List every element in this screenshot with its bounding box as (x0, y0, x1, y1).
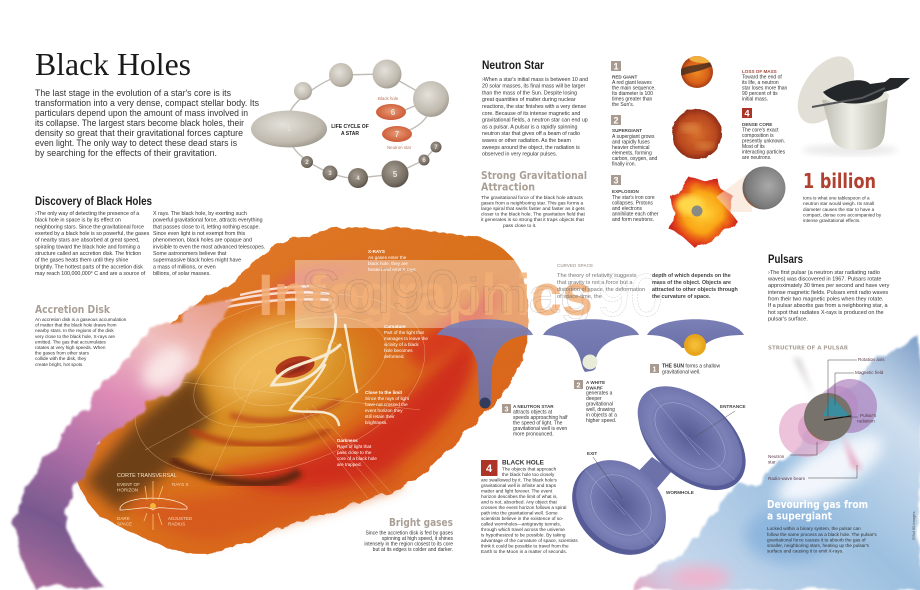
discovery text: phenomenon, black holes are opaque and (153, 238, 252, 244)
loss of mass: its life, a neutron (742, 80, 779, 86)
label 2: white dwarf: well, drawing (586, 407, 615, 413)
heading: strong gravitational attraction: Strong Gravitational (481, 170, 587, 182)
devouring gas text (767, 526, 877, 554)
label 3: neutron star: the speed of light. The (513, 420, 563, 426)
image credit: ©Sol 90 Images (911, 511, 916, 540)
neutron star text: core. Because of its intense magnetic and (482, 111, 580, 117)
fine orbit lines (112, 261, 448, 509)
pulsars text: If a pulsar absorbs gas from a neighboring star, a (768, 303, 888, 309)
discovery text: Some astronomers believe that (153, 251, 227, 257)
curved space text: mass of the object. Objects are (652, 280, 731, 286)
label: darkness: pass close to the (337, 450, 372, 455)
diagram caption: A STAR (341, 131, 359, 137)
diagram caption (331, 124, 369, 137)
curved space text (557, 263, 738, 300)
label 1: the sun (650, 364, 720, 376)
label 4: black hole: is hypothesized to be possible. By taking (481, 532, 566, 538)
label 4: black hole: and is not, absorbed. Any object that (481, 500, 558, 504)
devouring gas text: gravitational force causes it to absorb the gas of (767, 538, 866, 542)
label 4: black hole: BLACK HOLE (502, 460, 545, 466)
pulsars text: ›The first pulsar (a neutron star radiating radio (768, 270, 880, 276)
stage 3: explosion: EXPLOSION (612, 189, 639, 194)
stage 3: explosion (611, 175, 738, 248)
gravitational attraction text: large spiral that swirls faster and faster as it gets (481, 206, 585, 212)
devouring gas text: smaller, neighboring stars, heating up the pulsar's (767, 543, 870, 548)
label: darkness: Darkness (337, 438, 358, 443)
label: curvature: Curvature (384, 324, 406, 329)
bright gases text: Since the accretion disk is fed by gases (365, 530, 453, 536)
stage 3: explosion: The star's iron core (612, 195, 655, 201)
lower stages: 6 (422, 158, 426, 164)
heading: devouring gas: a supergiant (767, 510, 832, 522)
discovery text (35, 211, 265, 277)
intro text: The last stage in the evolution of a star's core is its (35, 88, 231, 99)
stage 3: explosion: and form neutrons. (612, 217, 654, 223)
neutron star text (482, 77, 588, 158)
gravitational attraction text: pass close to it. (503, 223, 536, 229)
upper stages (294, 60, 449, 117)
figure: one billion: intense gravitational effects. (803, 218, 860, 223)
stage 2: supergiant: elements, forming (612, 150, 652, 156)
label: curvature: vicinity of a black (384, 342, 419, 347)
label: close to the limit (365, 390, 410, 425)
pulsars text: hot spot that radiates X-rays is produced on the (768, 310, 884, 316)
label 4: black hole: are swallowed by it. The black hole's (481, 478, 558, 482)
lower stages (301, 142, 442, 188)
blue gas cloud (632, 337, 920, 590)
discovery text: exerted by a black hole is so powerful, the gases (35, 231, 150, 237)
discovery text: spiraling toward the black hole and forming a (35, 244, 140, 250)
loss of mass: initial mass. (742, 96, 768, 102)
gravitational attraction text: closer to the black hole. The gravitation field that (481, 212, 585, 218)
stage 4: dense core: interacting particles (742, 150, 786, 156)
label 3: neutron star (502, 404, 568, 438)
lower stages: 5 (393, 170, 398, 179)
stage 1: red giant: A red giant leaves (612, 80, 652, 86)
label 4: black hole: called wormholes—antigravity tunnels, (481, 522, 561, 526)
pulsars text: intense magnetic fields. Pulsars emit radio waves (768, 290, 888, 296)
accretion gas stream (15, 298, 232, 590)
lower stages: 3 (328, 171, 332, 177)
label: close to the limit: event horizon they (365, 408, 403, 413)
label: curvature (384, 324, 428, 359)
loss of mass: 90 percent of its (742, 91, 778, 97)
label: close to the limit: Close to the limit (365, 390, 402, 395)
label 2: white dwarf: A WHITE (586, 380, 605, 385)
label: close to the limit: Since the rays of light (365, 396, 410, 401)
gravitational attraction text: The gravitational force of the black hole attracts (481, 195, 583, 201)
discovery text: a mass of millions, or even (153, 264, 216, 270)
figure: one billion (803, 169, 882, 223)
neutron star text: great quantities of matter during nuclear (482, 97, 576, 103)
curved space text: The theory of relativity suggests (557, 273, 637, 279)
heading: pulsars: Pulsars (768, 254, 803, 266)
stage 4: dense core: The core's exact (742, 128, 779, 134)
pulsars text: from their two magnetic poles when they rotate. (768, 296, 884, 302)
lower disk glow (125, 440, 400, 540)
discovery text: neighboring stars. Since the gravitational force (35, 224, 144, 230)
heading: accretion disk: Accretion Disk (35, 304, 111, 316)
stage 3: explosion: collapses. Protons (612, 200, 653, 206)
shaded left side of disk (85, 372, 212, 512)
accretion disk text: nearby stars. In the regions of the disk (35, 328, 114, 333)
label 4: black hole: the black hole too closely (502, 472, 555, 477)
heading: devouring gas: Devouring gas from (767, 499, 868, 511)
wormhole labels: ENTRANCE (720, 404, 746, 409)
stage 4: dense core: composition is (742, 133, 774, 139)
figure: one billion: compact, dense core accompanied by (803, 212, 882, 218)
figure: one billion: tons is what one tablespoon of a (803, 196, 870, 200)
stage 4: dense core (742, 108, 786, 161)
black sample (823, 78, 910, 104)
label 2: white dwarf: generates a (586, 390, 613, 396)
label 3: neutron star: 3 (505, 406, 509, 414)
golden core (125, 294, 385, 496)
label 3: neutron star: gravitational well is even (513, 426, 567, 432)
neutron star text: ›When a star's initial mass is between 10 and (482, 77, 588, 83)
accretion disk text: emitted. The gas that accumulates (35, 339, 107, 344)
stage 2: supergiant: finally iron. (612, 162, 636, 168)
stage 2: supergiant: A supergiant grows (612, 134, 655, 140)
cross-section diagram: EVENT OF (117, 482, 140, 487)
gravitational attraction text: gases from a neighboring star. This gas forms a (481, 200, 584, 206)
curved space text: the curvature of space. (652, 294, 711, 300)
label: x-rays (368, 249, 416, 272)
gravity well: sun (647, 319, 744, 356)
stage 3: explosion: and electrons (612, 206, 643, 212)
gravity well: neutron star (437, 319, 533, 408)
intro text: particulars depend upon the amount of mass involved in (35, 108, 248, 119)
label: x-rays: black hole, they are (368, 261, 408, 266)
wormhole labels: WORMHOLE (666, 490, 694, 495)
heading: bright gases: Bright gases (389, 517, 453, 529)
label: x-rays: As gases enter the (368, 255, 407, 260)
label 1: the sun: gravitational well. (662, 370, 700, 376)
heading: strong gravitational attraction (481, 170, 587, 194)
label 1: the sun: THE SUN forms a shallow (662, 364, 720, 370)
stage 2: supergiant: heavier chemical (612, 145, 650, 151)
stage 3: explosion: 3 (613, 176, 619, 186)
intro text: by searching for the effects of their gravitation. (35, 148, 217, 159)
neutron star text: 20 solar masses, its final mass will be larger (482, 84, 586, 90)
watermark: Infographics (258, 263, 593, 328)
gravitational attraction text: it generates is so strong that it traps objects that (481, 217, 585, 223)
discovery text: billions, of solar masses. (153, 271, 211, 277)
stage 1: red giant: the main sequence. (612, 86, 656, 92)
neutron star stage (382, 126, 412, 150)
label 4: black hole: matter and light forever. The event (481, 488, 553, 494)
intro text (35, 88, 259, 159)
stage 4: dense core: DENSE CORE (742, 122, 772, 127)
figure: one billion: diameter causes the star to have a (803, 207, 875, 212)
stage 1: red giant: Its diameter is 100 (612, 91, 653, 97)
cross-section diagram: ADJUSTED (168, 516, 193, 521)
title: Black Holes (35, 46, 191, 82)
label 4: black hole (481, 460, 578, 554)
cup body (822, 95, 888, 150)
pulsars text: pulsar's surface. (768, 316, 808, 322)
label: curvature: manages to leave the (384, 336, 428, 341)
label 3: neutron star: more pronounced. (513, 432, 554, 438)
watermark: imag (467, 270, 592, 323)
devouring gas text: Locked within a binary system, the pulsar can (767, 526, 861, 531)
bright gases text: but at its edges is colder and darker. (373, 547, 453, 553)
label 4: black hole: horizon describes the limit of what is, (481, 494, 558, 499)
intro text: density so great that their gravitational forces capture (35, 128, 243, 139)
icon: cup holding a neutron star sample (786, 46, 910, 156)
neutron star stage: Neutron star (387, 145, 412, 150)
curved space text: of space-time, the (557, 294, 602, 300)
gravity well: white dwarf (543, 319, 639, 372)
label 2: white dwarf: gravitational (586, 402, 613, 408)
discovery text: supermassive black holes might have (153, 258, 241, 264)
gravitational attraction text (481, 195, 585, 229)
red spiral arms (215, 330, 475, 491)
dense core beam (716, 172, 752, 212)
label 3: neutron star: speeds approaching half (513, 415, 568, 421)
discovery text: structure called an accretion disk. The friction (35, 251, 141, 257)
loss of mass (742, 69, 788, 102)
label: curvature: Part of the light that (384, 330, 425, 335)
label: close to the limit: brightness. (365, 420, 387, 425)
spoon (812, 88, 885, 107)
pulsars text (767, 270, 890, 322)
heading: discovery of black holes: Discovery of Black Holes (35, 196, 152, 208)
wormhole labels: EXIT (587, 451, 597, 456)
cross-section diagram: HORIZON (117, 488, 138, 492)
bright gases text: intensely in the region closest to its core (364, 542, 453, 548)
label: darkness: are trapped. (337, 462, 362, 467)
accretion disk text: of matter that the black hole draws from (35, 323, 117, 328)
label 4: black hole: think it could be possible to travel from the (481, 544, 569, 548)
discovery text: powerful gravitational force, attracts everything (153, 218, 263, 224)
label 4: black hole: The objects that approach (502, 466, 557, 472)
diagram caption: LIFE CYCLE OF (331, 124, 369, 130)
neutron star text: sweeps around the object, the radiation is (482, 145, 580, 151)
accretion disk illustration (77, 228, 531, 552)
accretion disk text: collide with the disk, they (35, 356, 87, 361)
wormhole labels (587, 404, 746, 498)
discovery text: brightly. The hottest parts of the accretion disk (35, 264, 143, 270)
wormhole (553, 367, 765, 574)
neutron star stage: 7 (395, 130, 400, 139)
black hole stage: 6 (391, 108, 396, 117)
label 2: white dwarf: DWARF (586, 386, 603, 390)
star 1: 1 (287, 127, 291, 133)
lower stages: 4 (356, 176, 360, 182)
neutron star text: neutron star that gives off a beam of radio (482, 131, 580, 137)
structure of a pulsar diagram: Radio-wave beam (768, 476, 805, 481)
structure of a pulsar diagram: radiation (857, 418, 875, 424)
label 2: white dwarf (574, 380, 617, 424)
label 4: black hole: path into the gravitational well. Some (481, 510, 558, 516)
heading: strong gravitational attraction: Attraction (481, 182, 535, 194)
stage 4: dense core: presently unknown. (742, 138, 785, 144)
stage 1: red giant: 1 (613, 62, 619, 72)
stage 2: supergiant: SUPERGIANT (612, 128, 642, 133)
label: close to the limit: still retain their (365, 414, 395, 419)
black hole opening (273, 352, 317, 382)
label 4: black hole: gravitational well is infinite and traps (481, 483, 557, 488)
label 2: white dwarf: in objects at a (586, 412, 617, 418)
stage 3: explosion: annihilate each other (612, 212, 659, 218)
discovery text: X rays. The black hole, by exerting such (153, 211, 247, 217)
discovery text: of nearby stars are absorbed at great speed, (35, 238, 140, 244)
loss of mass: Toward the end of (742, 74, 782, 80)
bright gases text: spinning at high speed, it shines (382, 536, 453, 542)
stage 2: supergiant: and rapidly fuses (612, 140, 650, 146)
devouring gas text: surface and causing it to emit X-rays. (767, 548, 843, 554)
curved space text: distortion of space, the deformation (557, 287, 645, 293)
stage 1: red giant: RED GIANT (612, 74, 637, 80)
structure of a pulsar diagram: star (768, 460, 776, 464)
accretion disk text: create bright, hot spots. (35, 362, 84, 367)
label 1: the sun: 1 (653, 366, 657, 374)
structure of a pulsar diagram: Pulsar's (860, 413, 877, 418)
neutron core sphere (742, 166, 786, 210)
neutron star text: waves or other radiation. As the beam (482, 138, 572, 144)
life cycle of a star diagram (251, 60, 449, 188)
curved space text: CURVED SPACE (557, 263, 593, 268)
cross-section diagram: RADIUS (168, 522, 185, 526)
discovery text: Since even light is not exempt from this (153, 231, 246, 237)
label 4: black hole: advantage of the curvature of space, scientists (481, 538, 578, 543)
stage 1: red giant: times greater than (612, 96, 653, 102)
stage 1: red giant: the Sun's. (612, 102, 634, 108)
label 2: white dwarf: deeper (586, 396, 602, 402)
loss of mass: star loses more than (742, 86, 788, 92)
curved space text: that gravity is not a force but a (557, 280, 633, 286)
structure of a pulsar diagram: Rotation axis (858, 357, 885, 362)
cross-section diagram: DARK (117, 516, 131, 521)
structure of a pulsar diagram: STRUCTURE OF A PULSAR (768, 346, 849, 352)
label 2: white dwarf: 2 (577, 382, 581, 390)
structure of a pulsar diagram: Magnetic field (855, 370, 884, 375)
accretion disk text: rotates at very high speeds. When (35, 345, 106, 350)
pulsars text: approximately 30 times per second and have very (768, 283, 890, 289)
intro text: its collapse. The largest stars become black holes, their (35, 118, 245, 129)
discovery text: black hole in space is by its effect on (35, 218, 121, 224)
label 4: black hole: crosses the event horizon follows a spiral (481, 505, 566, 510)
lower stages: 2 (305, 160, 309, 166)
label: darkness (337, 438, 377, 467)
black hole stage: Black hole (378, 96, 399, 101)
curved space text: attracted to other objects through (652, 287, 738, 293)
label: darkness: core of a black hole (337, 456, 377, 461)
stage 4: dense core: 4 (744, 108, 750, 118)
label 3: neutron star: attracts objects at (513, 410, 553, 416)
star 1 (251, 110, 327, 148)
discovery text: may reach 100,000,000° C and are a source of (35, 271, 146, 277)
discovery text: of the gases heats them until they shine (35, 258, 128, 264)
stage 4: dense core: Most of its (742, 144, 765, 150)
neutron star text: reactions, the star finishes with a very dense (482, 104, 586, 110)
neutron star text: gravitational fields, a neutron star can end up (482, 118, 588, 124)
loss of mass: LOSS OF MASS (742, 69, 777, 74)
cup lid (786, 46, 866, 134)
accretion disk text (35, 317, 127, 367)
label: close to the limit: have not crossed the (365, 402, 408, 407)
stage 2: supergiant (611, 109, 722, 168)
label: darkness: Rays of light that (337, 444, 372, 449)
pulsars text: waves) was discovered in 1967. Pulsars rotate (767, 276, 881, 282)
heading: neutron star: Neutron Star (482, 60, 544, 72)
label 4: black hole: 4 (486, 463, 493, 475)
accretion disk text: very close to the black hole, X-rays are (35, 334, 115, 339)
cross-section diagram: SPACE (117, 522, 132, 526)
lower stages: 7 (434, 145, 438, 151)
stage 2: supergiant: carbon, oxygen, and (612, 156, 658, 162)
light path arrows (272, 300, 357, 425)
neutron star text: than the mass of the Sun. Despite losing (482, 90, 577, 96)
structure of a pulsar diagram (768, 346, 885, 481)
intro text: even light. The only way to detect these dead stars is (35, 138, 237, 149)
label: x-rays: heated and emit X-rays (368, 267, 416, 272)
stage 1: red giant (611, 56, 713, 106)
label: curvature: deformed. (384, 354, 405, 359)
black hole stage (376, 96, 406, 120)
intro text: transformation into a very dense, compact stellar body. Its (35, 98, 259, 109)
devouring gas text: follow the same process as a black hole. The pulsar's (767, 532, 877, 537)
watermark: 90 (597, 262, 663, 329)
stage 2: supergiant: 2 (613, 116, 619, 126)
pink upper rim (240, 262, 400, 310)
accretion disk text: An accretion disk is a gaseous accumulation (35, 317, 127, 322)
cross-section diagram: RAYS X (172, 482, 189, 487)
cross-section diagram: CORTE TRANSVERSAL (117, 473, 177, 479)
stage 4: dense core: are neutrons. (742, 155, 771, 161)
accretion disk text: the gases from other stars (35, 351, 90, 356)
label 3: neutron star: A NEUTRON STAR (513, 404, 554, 409)
figure: one billion: neutron star would weigh. Its small (803, 201, 874, 206)
label: x-rays: X-RAYS (368, 249, 385, 254)
label: curvature: hole becomes (384, 348, 413, 353)
discovery text: ›The only way of detecting the presence of a (35, 211, 139, 217)
x-ray stripes (215, 286, 335, 310)
heading: devouring gas (767, 499, 868, 522)
label 4: black hole: Earth to the Moon in a matter of seconds. (481, 549, 567, 554)
curved space text: depth of which depends on the (652, 273, 731, 279)
disk body (77, 228, 531, 552)
discovery text: invisible to even the most advanced telescopes. (153, 244, 265, 250)
label 4: black hole: scientists believe in the existence of so- (481, 516, 564, 521)
label 4: black hole: through which travel across the universe (481, 527, 565, 532)
watermark: Sol90 (300, 258, 460, 325)
structure of a pulsar diagram: Neutron (768, 454, 785, 459)
neutron star text: observed in very regular pulses. (482, 152, 557, 158)
label 2: white dwarf: higher speed. (586, 418, 616, 424)
bright gases text (364, 530, 453, 553)
neutron star text: as a pulsar. A pulsar is a rapidly spinning (482, 124, 577, 130)
figure: one billion: 1 billion (803, 169, 876, 193)
discovery text: that passes close to it, letting nothing escape. (153, 224, 260, 230)
cross-section diagram (117, 473, 193, 530)
